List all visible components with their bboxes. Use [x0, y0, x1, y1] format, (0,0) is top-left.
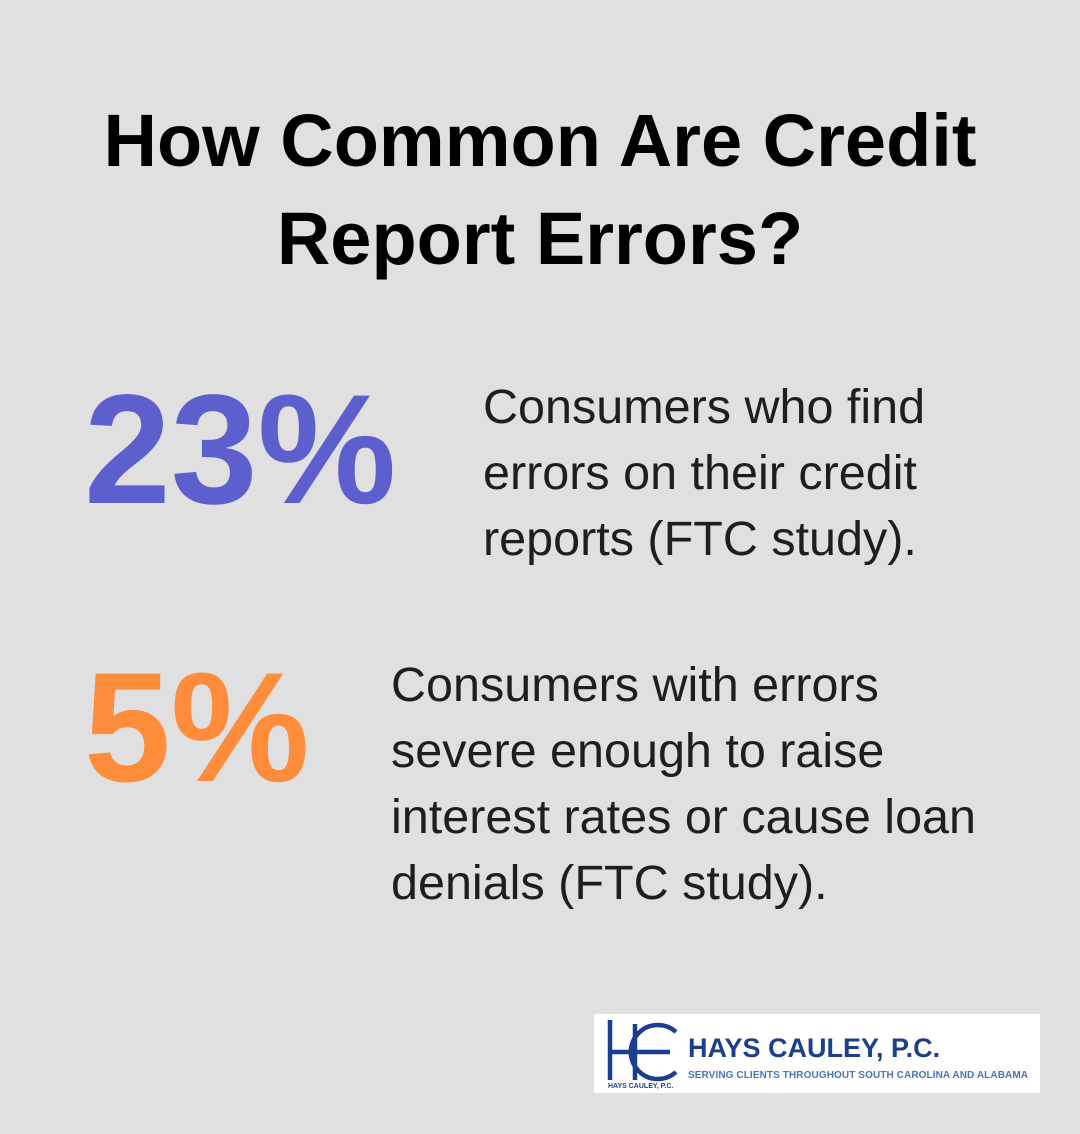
stat: 23%: 23%	[84, 363, 396, 537]
text: 23% description: reports (FTC study).	[483, 512, 917, 566]
logo	[594, 1014, 1040, 1093]
logo small text: HAYS CAULEY, P.C.	[608, 1083, 673, 1090]
text: 5% description: severe enough to raise	[391, 724, 884, 778]
logo name: HAYS CAULEY, P.C.	[688, 1033, 940, 1063]
title	[104, 99, 976, 280]
logo tagline: SERVING CLIENTS THROUGHOUT SOUTH CAROLINA AND ALABAMA	[688, 1070, 1028, 1081]
text: 5% description: Consumers with errors	[391, 658, 879, 712]
text: 5% description: interest rates or cause loan	[391, 790, 976, 844]
title: Report Errors?	[277, 197, 803, 280]
text: 5% description: denials (FTC study).	[391, 856, 828, 910]
text: 5% description	[391, 658, 976, 910]
text: 23% description: errors on their credit	[483, 446, 917, 500]
title: How Common Are Credit	[104, 99, 976, 182]
icon: HC monogram	[608, 1020, 678, 1082]
text: 23% description	[483, 380, 925, 566]
stat: 5%: 5%	[84, 641, 309, 815]
text: 23% description: Consumers who find	[483, 380, 925, 434]
